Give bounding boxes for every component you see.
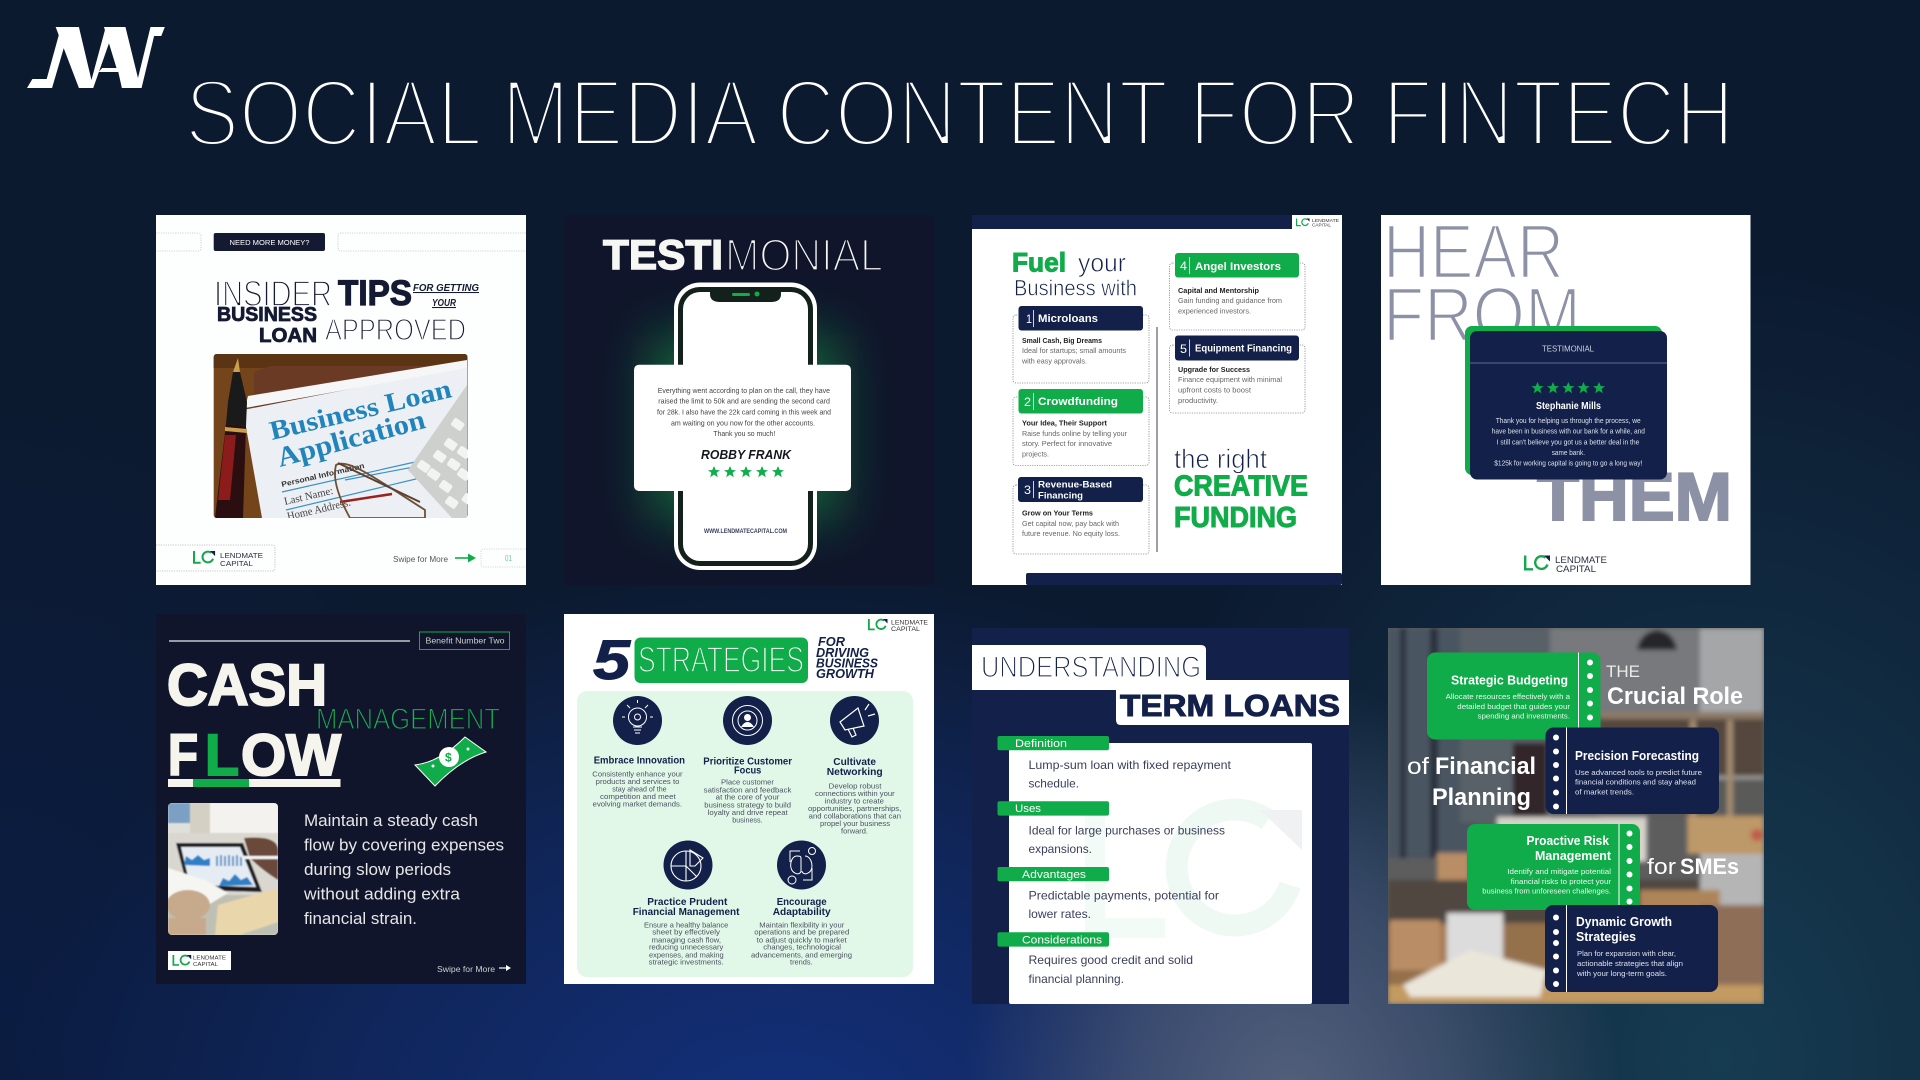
text: advantages: Predictable payments, potential for — [1028, 888, 1219, 902]
card: dynamic growth strategies: with your long-term goals. — [1576, 969, 1667, 978]
card: Stephanie Mills testimonial: Thank you for helping us through the process, we — [1496, 418, 1641, 425]
card: dynamic growth strategies: Dynamic Growth — [1576, 915, 1672, 929]
tag: benefit number two — [420, 632, 510, 650]
body text: maintain a steady cash flow: without adding extra — [303, 886, 461, 904]
text: definition: schedule. — [1028, 776, 1079, 790]
card 1: microloans: with easy approvals. — [1021, 356, 1087, 366]
strategy: prioritize customer focus: at the core of your — [716, 793, 780, 802]
card: dynamic growth strategies: Strategies — [1576, 930, 1636, 944]
strategy: cultivate networking: Networking — [827, 766, 883, 778]
heading: 5 strategies for driving business growth — [593, 628, 879, 691]
strategy: practice prudent financial management: Ensure a healthy balance — [644, 920, 728, 929]
heading: testimonial: TESTI — [603, 231, 723, 278]
tag: advantages — [998, 867, 1109, 881]
heading: cash management flow — [167, 653, 500, 788]
strategy: prioritize customer focus: business. — [732, 816, 763, 825]
logo: Lendmate Capital small: CAPITAL — [1312, 222, 1332, 228]
card 4: angel investors: Capital and Mentorship — [1178, 286, 1260, 295]
card 1: microloans: Ideal for startups; small amounts — [1022, 346, 1126, 355]
panel: testimonial phone post — [602, 239, 881, 570]
icon: five stars — [1532, 382, 1605, 393]
card 3: revenue-based financing: Revenue-Based — [1038, 480, 1112, 490]
heading: insider tips: FOR GETTING — [413, 282, 479, 294]
strategy: prioritize customer focus: Focus — [734, 765, 761, 777]
tag: advantages: Advantages — [1022, 869, 1087, 881]
card 1: microloans: Microloans — [1038, 313, 1098, 325]
tag: uses: Uses — [1015, 803, 1042, 815]
strategy: practice prudent financial management — [633, 840, 740, 967]
strategy: embrace innovation: Consistently enhance your — [592, 769, 683, 778]
heading: testimonial: MONIAL — [725, 229, 883, 280]
card: dynamic growth strategies — [1545, 905, 1718, 992]
swipe for more with arrow: 01 — [505, 554, 512, 563]
strategy: encourage adaptability: Encourage — [777, 896, 827, 908]
panel: cash management flow post — [156, 614, 526, 984]
strategy: embrace innovation: evolving market demands. — [593, 799, 682, 808]
photo: business loan application: Last Name: — [283, 485, 334, 508]
card 5: equipment financing — [1170, 336, 1305, 413]
strategy: cultivate networking: propel your business — [820, 819, 890, 828]
footer logo: Lendmate Capital: LENDMATE — [220, 551, 263, 560]
strategy: encourage adaptability: changes, technological — [763, 943, 841, 952]
strategy: practice prudent financial management: reducing unnecessary — [649, 943, 724, 952]
panel: crucial role of financial planning post — [1388, 628, 1764, 1004]
footer logo: Lendmate Capital: CAPITAL — [220, 559, 253, 568]
heading: cash management flow: F — [168, 723, 198, 788]
body text: maintain a steady cash flow: flow by covering expenses — [304, 836, 504, 854]
heading: insider tips: YOUR — [432, 297, 456, 309]
card: precision forecasting: Precision Forecasting — [1575, 749, 1699, 763]
heading: 5 strategies for driving business growth: STRATEGIES — [638, 639, 804, 680]
icon: dollar bill — [415, 737, 486, 786]
strategy: prioritize customer focus: Prioritize Customer — [703, 755, 792, 767]
heading: 5 strategies for driving business growth: GROWTH — [816, 667, 875, 681]
heading: insider tips: APPROVED — [325, 313, 466, 347]
strategy: practice prudent financial management: Practice Prudent — [647, 896, 728, 908]
strategy: prioritize customer focus: business strategy to build — [704, 800, 791, 809]
card: Robby Frank quote: Thank you so much! — [713, 429, 775, 438]
tag: definition: Definition — [1015, 738, 1067, 750]
card 1: microloans: 1 — [1026, 312, 1032, 326]
strategy: embrace innovation: competition and meet — [600, 792, 676, 801]
strategy: embrace innovation: products and services to — [596, 777, 679, 786]
strategy: practice prudent financial management: strategic investments. — [649, 958, 724, 967]
card: Robby Frank quote: am waiting on you now for the other accounts. — [671, 418, 815, 427]
card: Robby Frank quote: Everything went according to plan on the call, they have — [658, 386, 830, 395]
card 3: revenue-based financing: Financing — [1038, 490, 1083, 502]
tag: benefit number two: Benefit Number Two — [426, 636, 505, 646]
heading: the crucial role of financial planning for SMEs: Crucial Role — [1607, 683, 1743, 710]
card: Stephanie Mills testimonial: same bank. — [1552, 450, 1585, 457]
heading: hear from them — [1383, 209, 1732, 535]
strategy: cultivate networking: opportunities, partnerships, — [808, 804, 901, 813]
card 4: angel investors: Gain funding and guidance from — [1178, 296, 1282, 305]
card 2: crowdfunding: 2 — [1024, 395, 1031, 409]
heading: the crucial role of financial planning for SMEs: Financial — [1435, 753, 1536, 780]
heading: understanding — [972, 645, 1206, 690]
card 3: revenue-based financing: future revenue. No equity loss. — [1022, 529, 1120, 538]
heading: hear from them: FROM — [1383, 272, 1581, 358]
strategy: cultivate networking: connections within your — [815, 789, 895, 798]
strategy: encourage adaptability: Adaptability — [773, 906, 831, 918]
strategy: prioritize customer focus: Place customer — [721, 778, 775, 787]
heading: the right creative funding: CREATIVE — [1174, 470, 1308, 502]
panel: 5 strategies post — [564, 614, 934, 984]
heading: insider tips: LOAN — [259, 325, 317, 347]
card: Stephanie Mills testimonial: TESTIMONIAL — [1542, 344, 1594, 354]
heading: the crucial role of financial planning for SMEs: of — [1407, 753, 1430, 779]
heading: fuel your business with — [1012, 248, 1137, 300]
logo: Lendmate Capital boxed: CAPITAL — [193, 962, 218, 968]
card 2: crowdfunding — [1013, 389, 1149, 466]
logo: Lendmate Capital: CAPITAL — [891, 626, 920, 633]
text: uses: expansions. — [1028, 842, 1092, 856]
card 4: angel investors: experienced investors. — [1178, 306, 1251, 316]
card: Robby Frank quote: for 28k. I also have the 22k card coming in this week and — [657, 408, 831, 416]
strategy: encourage adaptability: operations and be prepared — [754, 928, 849, 937]
card: strategic budgeting: detailed budget that guides your — [1457, 702, 1571, 711]
card: precision forecasting: of market trends. — [1575, 788, 1634, 796]
card: Stephanie Mills testimonial: $125k for working capital is going to go a long way! — [1494, 461, 1642, 468]
heading: the right creative funding — [1174, 444, 1308, 534]
strategy: prioritize customer focus — [703, 696, 792, 825]
heading: the crucial role of financial planning for SMEs: Planning — [1432, 784, 1531, 811]
strategy: encourage adaptability: Maintain flexibility in your — [759, 920, 845, 929]
logo: Lendmate Capital — [1525, 555, 1607, 575]
strategy: cultivate networking: industry to create — [825, 796, 884, 805]
logo: Lendmate Capital: LENDMATE — [891, 620, 929, 626]
photo: blurred office background — [1388, 628, 1764, 1004]
heading: cash management flow: CASH — [167, 653, 327, 718]
card 5: equipment financing: upfront costs to boost — [1178, 386, 1251, 394]
heading: 5 strategies for driving business growth: BUSINESS — [816, 656, 879, 670]
strategy: embrace innovation: Embrace Innovation — [594, 754, 685, 766]
heading: the crucial role of financial planning for SMEs: THE — [1606, 662, 1640, 681]
card 4: angel investors: 4 — [1180, 259, 1187, 273]
card 1: microloans: Small Cash, Big Dreams — [1022, 336, 1102, 345]
text: considerations — [1028, 953, 1193, 986]
heading: the right creative funding: FUNDING — [1174, 502, 1297, 534]
card 2: crowdfunding: Your Idea, Their Support — [1022, 418, 1108, 428]
heading: fuel your business with: Business with — [1014, 276, 1137, 300]
heading: fuel your business with: your — [1078, 248, 1126, 278]
icon: five stars — [708, 466, 784, 477]
card 5: equipment financing: 5 — [1180, 342, 1187, 356]
swipe for more with arrow — [393, 549, 526, 567]
card 5: equipment financing: Equipment Financing — [1195, 344, 1292, 354]
card: proactive risk management — [1467, 824, 1640, 910]
photo: tablet with charts — [166, 803, 278, 935]
card: precision forecasting: financial conditions and stay ahead — [1575, 778, 1696, 786]
text: considerations: financial planning. — [1028, 972, 1124, 986]
logo: Lendmate Capital small: LENDMATE — [1312, 218, 1339, 223]
text: advantages: lower rates. — [1028, 907, 1091, 921]
text: advantages — [1028, 888, 1219, 921]
card 3: revenue-based financing: Get capital now, pay back with — [1022, 519, 1119, 528]
strategy: encourage adaptability — [751, 840, 852, 967]
website url: WWW.LENDMATECAPITAL.COM — [704, 529, 787, 535]
strategy: encourage adaptability: to adjust quickly to market — [757, 935, 847, 944]
panel: understanding term loans post — [972, 628, 1349, 1004]
card: Stephanie Mills testimonial: have been in business with our bank for a while, and — [1492, 429, 1645, 436]
strategy: prioritize customer focus: loyalty and drive repeat — [708, 808, 788, 817]
logo: Lendmate Capital boxed: LENDMATE — [193, 956, 226, 962]
body text: maintain a steady cash flow — [303, 812, 504, 928]
card: proactive risk management: business from unforeseen challenges. — [1482, 886, 1611, 896]
tag: uses — [998, 801, 1109, 816]
photo: business loan application: Application — [274, 404, 429, 474]
heading: the crucial role of financial planning for SMEs: for — [1647, 854, 1676, 879]
text: definition — [1028, 758, 1232, 790]
logo: Lendmate Capital: CAPITAL — [1556, 564, 1596, 575]
card 4: angel investors — [1170, 253, 1305, 330]
heading: 5 strategies for driving business growth: DRIVING — [816, 646, 869, 660]
heading: 5 strategies for driving business growth: 5 — [593, 628, 631, 691]
card 2: crowdfunding: Raise funds online by telling your — [1022, 429, 1128, 438]
heading: understanding: UNDERSTANDING — [981, 651, 1201, 684]
strategy: prioritize customer focus: satisfaction and feedback — [704, 785, 792, 794]
heading: insider tips — [214, 273, 479, 347]
card: Stephanie Mills testimonial: Stephanie Mills — [1536, 401, 1601, 412]
card 2: crowdfunding: projects. — [1022, 450, 1049, 458]
heading: term loans: TERM LOANS — [1120, 688, 1340, 723]
card: strategic budgeting: spending and investments. — [1478, 712, 1570, 720]
strategy: cultivate networking — [808, 696, 901, 836]
card 2: crowdfunding: Crowdfunding — [1038, 396, 1118, 408]
strategy: practice prudent financial management: sheet by effectively — [652, 928, 720, 937]
panel: insider tips post — [156, 215, 526, 585]
panel: fuel your business post — [972, 215, 1342, 585]
text: uses — [1028, 824, 1225, 856]
panel: mint strategies background — [577, 691, 913, 977]
icon: phone — [674, 282, 817, 570]
tag: considerations — [998, 932, 1109, 947]
heading: cash management flow: OW — [241, 723, 341, 788]
logo: MAV mark — [27, 27, 165, 88]
text: considerations: Requires good credit and solid — [1028, 953, 1193, 967]
card: Robby Frank quote: ROBBY FRANK — [701, 447, 793, 462]
card: strategic budgeting: Allocate resources effectively with a — [1446, 692, 1571, 701]
strategy: practice prudent financial management: Financial Management — [633, 906, 740, 918]
strategy: cultivate networking: Develop robust — [829, 781, 881, 790]
card: Robby Frank quote — [634, 365, 851, 491]
card: strategic budgeting: Strategic Budgeting — [1451, 674, 1568, 688]
card: precision forecasting: Use advanced tools to predict future — [1575, 768, 1702, 777]
card: proactive risk management: financial risks to protect your — [1511, 877, 1612, 886]
heading: insider tips: INSIDER — [214, 273, 332, 314]
heading: hear from them: HEAR — [1383, 209, 1564, 295]
card 5: equipment financing: productivity. — [1178, 396, 1218, 405]
card: precision forecasting — [1546, 728, 1719, 814]
heading: hear from them: THEM — [1537, 459, 1732, 535]
body text: maintain a steady cash flow: during slow periods — [304, 861, 451, 879]
logo: Lendmate Capital — [869, 619, 929, 633]
card: term loan details — [998, 736, 1312, 1004]
icon: dollar bill: $ — [445, 750, 452, 764]
card: dynamic growth strategies: Plan for expansion with clear, — [1577, 949, 1676, 958]
heading: cash management flow: MANAGEMENT — [316, 703, 500, 736]
tag: considerations: Considerations — [1022, 934, 1103, 946]
strategy: encourage adaptability: advancements, and emerging — [751, 950, 852, 959]
card: strategic budgeting — [1427, 652, 1600, 740]
card: proactive risk management: Identify and mitigate potential — [1507, 867, 1611, 876]
strategy: cultivate networking: Cultivate — [833, 756, 876, 768]
card 4: angel investors: Angel Investors — [1195, 261, 1281, 273]
card 1: microloans — [1013, 306, 1149, 383]
card: proactive risk management: Management — [1535, 849, 1612, 863]
strategy: embrace innovation: stay ahead of the — [612, 784, 667, 793]
tag: need more money: NEED MORE MONEY? — [230, 238, 310, 247]
body text: maintain a steady cash flow: Maintain a steady cash — [304, 812, 478, 830]
strategy: cultivate networking: and collaborations that can — [809, 811, 901, 820]
photo: business loan application: Personal Information — [280, 461, 366, 489]
card: Stephanie Mills testimonial — [1465, 326, 1667, 480]
heading: insider tips: BUSINESS — [217, 304, 317, 326]
heading: insider tips: TIPS — [338, 274, 412, 313]
heading: term loans — [1116, 680, 1349, 725]
strategy: encourage adaptability: trends. — [790, 958, 813, 967]
photo: business loan application: Business Loan — [266, 374, 454, 446]
card: dynamic growth strategies: actionable strategies that align — [1577, 959, 1683, 968]
logo: Lendmate Capital boxed — [168, 951, 231, 970]
card 3: revenue-based financing: Grow on Your Terms — [1022, 508, 1093, 518]
card 5: equipment financing: Upgrade for Success — [1178, 365, 1250, 374]
strategy: practice prudent financial management: managing cash flow, — [652, 935, 721, 944]
text: definition: Lump-sum loan with fixed repayment — [1028, 758, 1232, 772]
photo: business loan application — [213, 354, 476, 523]
heading: the crucial role of financial planning for SMEs: SMEs — [1680, 854, 1739, 879]
text: uses: Ideal for large purchases or business — [1028, 824, 1225, 838]
swipe for more with arrow: Swipe for More — [437, 965, 496, 974]
photo: business loan application: Home Address: — [286, 497, 352, 523]
heading: 5 strategies for driving business growth: FOR — [818, 635, 845, 649]
body text: maintain a steady cash flow: financial strain. — [304, 910, 417, 928]
heading: cash management flow: L — [205, 723, 239, 788]
logo: Lendmate Capital: LENDMATE — [1555, 555, 1607, 566]
card 3: revenue-based financing — [1013, 477, 1149, 554]
card 3: revenue-based financing: 3 — [1024, 483, 1031, 497]
heading: the right creative funding: the right — [1174, 444, 1267, 474]
card 2: crowdfunding: story. Perfect for innovative — [1022, 439, 1112, 448]
heading: testimonial — [603, 229, 883, 280]
watermark: LC — [1095, 809, 1302, 928]
card: Robby Frank quote: raised the limit to 50k and are sending the second card — [658, 397, 830, 406]
heading: fuel your business with: Fuel — [1012, 248, 1066, 278]
card: Stephanie Mills testimonial: I still can't believe you got us a better deal in the — [1497, 439, 1639, 446]
strategy: cultivate networking: forward. — [841, 827, 868, 836]
card: proactive risk management: Proactive Risk — [1526, 834, 1609, 848]
logo: Lendmate Capital small — [1297, 218, 1339, 228]
heading: the crucial role of financial planning for SMEs — [1407, 662, 1743, 879]
footer logo: Lendmate Capital — [156, 545, 275, 571]
panel: hear from them post — [1381, 209, 1750, 585]
tag: need more money — [214, 233, 325, 251]
tag: definition — [998, 736, 1109, 750]
card 5: equipment financing: Finance equipment with minimal — [1178, 375, 1282, 384]
strategy: embrace innovation — [592, 696, 685, 808]
strategy: practice prudent financial management: expenses, and making — [649, 950, 724, 959]
swipe for more with arrow: Swipe for More — [393, 555, 449, 564]
